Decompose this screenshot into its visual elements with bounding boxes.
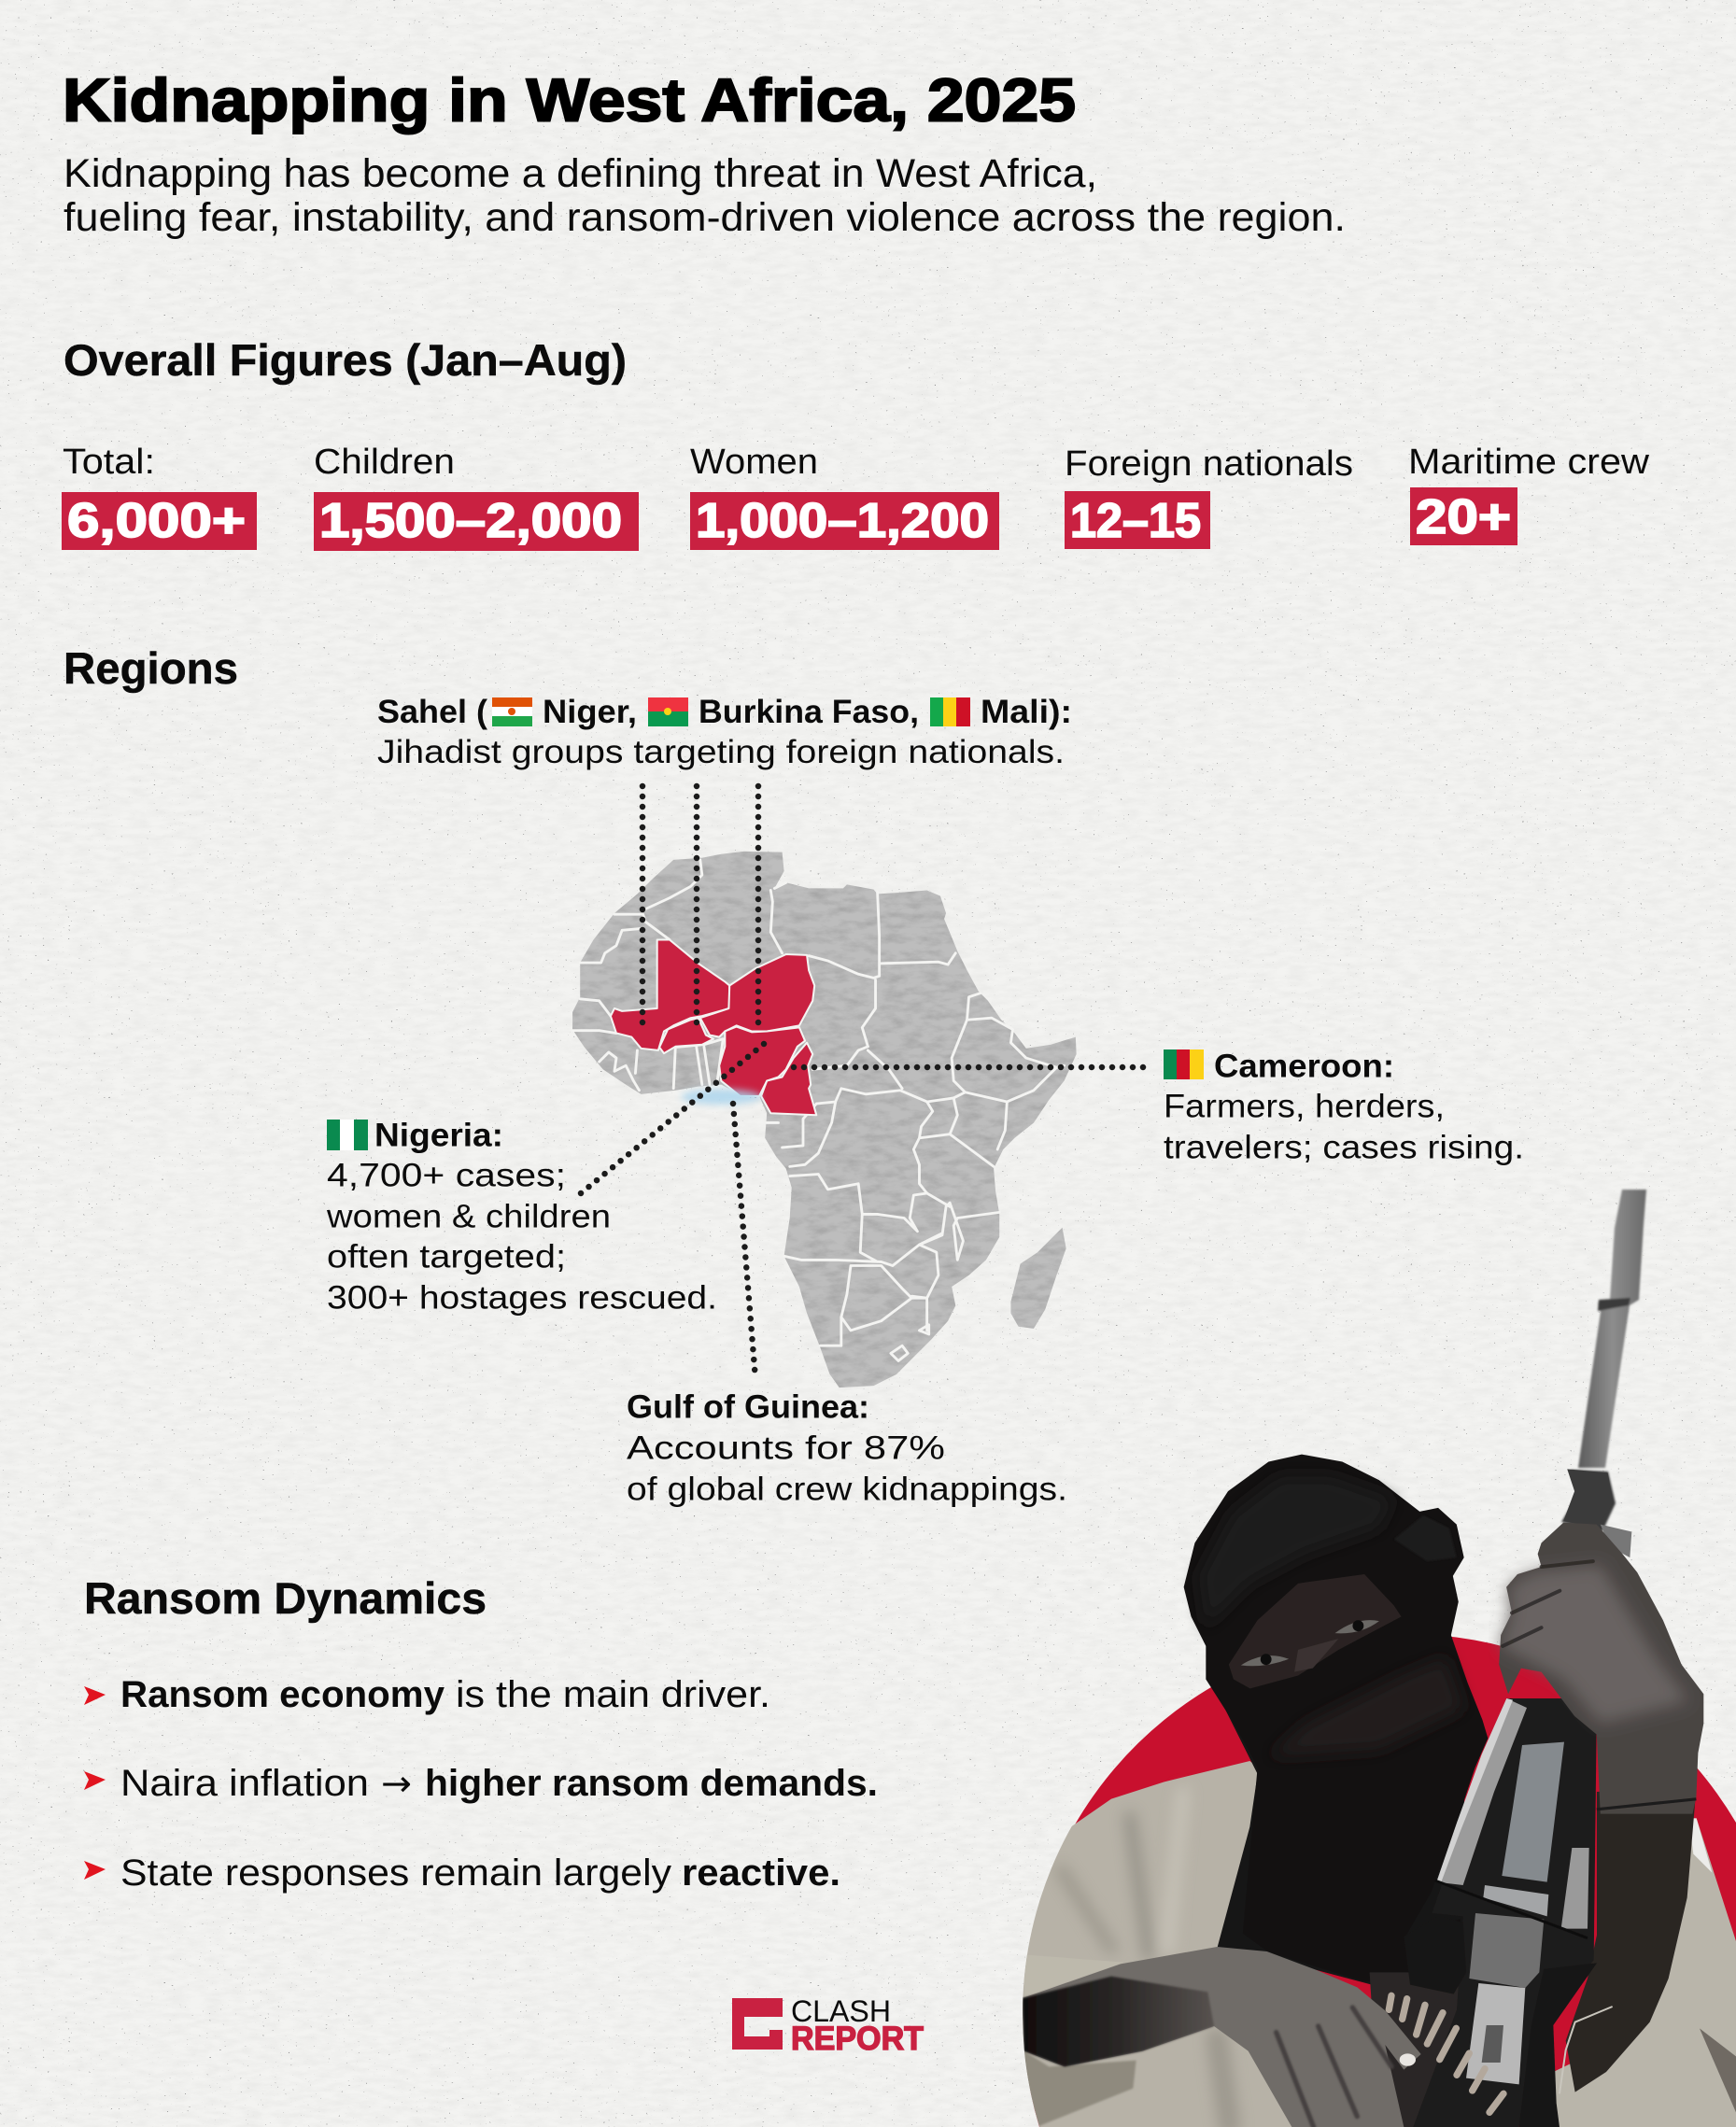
red circle [1023, 1634, 1736, 2127]
label: Sahel: Burkina Faso, [699, 694, 919, 730]
bullet: ransom economy: is the main driver. [456, 1674, 770, 1715]
label: Cameroon: Cameroon: [1214, 1048, 1394, 1085]
subtitle: fueling fear, instability, and ransom-driven violence across the region. [64, 195, 1346, 240]
head wrap and mask [1184, 1455, 1488, 1981]
label: Nigeria: often targeted; [327, 1238, 566, 1275]
bullet: ransom economy: Ransom economy [120, 1674, 445, 1715]
ammunition belt [1389, 1995, 1503, 2112]
bullet: state responses [84, 1852, 840, 1894]
land mass [572, 852, 1077, 1387]
rifle barrel [1561, 1190, 1646, 1531]
label: Nigeria: 300+ hostages rescued. [327, 1279, 717, 1317]
left arm and hand [1023, 1947, 1421, 2127]
subtitle: Kidnapping has become a defining threat in West Africa, [64, 151, 1097, 196]
stat: women [690, 443, 999, 550]
bullet: state responses: reactive. [682, 1852, 840, 1894]
robe: right side [1553, 1818, 1736, 2127]
label: Cameroon: travelers; cases rising. [1164, 1130, 1524, 1165]
heading: ransom dynamics: Ransom Dynamics [84, 1573, 487, 1623]
bullet: ransom economy [84, 1674, 770, 1715]
label: Cameroon [1164, 1048, 1524, 1165]
label: Nigeria: Nigeria: [374, 1117, 503, 1154]
photo: armed militant on red circle [1018, 1190, 1736, 2127]
label: Gulf of Guinea [627, 1389, 1067, 1507]
bullet: state responses: State responses remain largely [120, 1852, 671, 1894]
rifle body [1370, 1698, 1613, 2127]
label: Gulf of Guinea: Gulf of Guinea: [627, 1389, 869, 1425]
flag: Nigeria [327, 1120, 368, 1150]
label: Sahel: Sahel ( [377, 694, 487, 730]
stat: maritime crew: Maritime crew [1408, 443, 1650, 482]
dotted leaders [581, 786, 1146, 1379]
face and eyes [1229, 1574, 1402, 1688]
stat: foreign nationals: Foreign nationals [1065, 444, 1353, 484]
logo: Clash Report: REPORT [791, 2021, 924, 2057]
flag: Burkina Faso [648, 697, 688, 726]
stat: children [314, 443, 639, 551]
title: Kidnapping in West Africa, 2025 [63, 65, 1076, 134]
heading: overall figures: Overall Figures (Jan–Aug) [64, 335, 627, 385]
right forearm [1566, 1785, 1697, 2092]
stat: total: 6,000+ [67, 494, 246, 548]
stat: foreign nationals [1065, 444, 1353, 549]
heading: regions: Regions [64, 643, 238, 693]
label: Sahel: Mali): [981, 694, 1072, 730]
gulf of Guinea highlight [681, 1090, 761, 1105]
flag: Cameroon [1164, 1049, 1204, 1079]
map of Africa [572, 852, 1077, 1387]
black scarf over neck and chest [1211, 1681, 1464, 1995]
label: Cameroon: Farmers, herders, [1164, 1089, 1445, 1124]
stat: maritime crew: 20+ [1416, 490, 1511, 544]
label: Nigeria [326, 1117, 717, 1317]
stat: women: 1,000–1,200 [696, 494, 989, 548]
stat: children: Children [314, 443, 455, 482]
label: Sahel: Jihadist groups targeting foreign nationals. [377, 734, 1065, 770]
flag: Mali [930, 697, 970, 726]
flag: Niger [492, 697, 532, 726]
robe: left shoulder and torso [1023, 1761, 1292, 2127]
country borders [572, 860, 1065, 1361]
rifle sight bracket and hand [1499, 1469, 1703, 1814]
stat: women: Women [690, 443, 818, 482]
bullet: naira inflation: higher ransom demands. [425, 1763, 878, 1804]
highlighted countries [611, 940, 816, 1115]
stat: total [62, 443, 257, 550]
bullet: naira inflation: Naira inflation [120, 1763, 369, 1804]
label: Gulf of Guinea: Accounts for 87% [627, 1430, 945, 1466]
logo: Clash Report [732, 1994, 924, 2057]
label: Sahel [377, 694, 1072, 770]
stat: maritime crew [1408, 443, 1650, 545]
stat: children: 1,500–2,000 [319, 494, 622, 548]
stat: total: Total: [63, 443, 155, 482]
stat: foreign nationals: 12–15 [1070, 494, 1201, 548]
label: Nigeria: women & children [326, 1199, 611, 1234]
label: Sahel: Niger, [543, 694, 637, 730]
bullet: naira inflation [84, 1763, 878, 1804]
bullet: naira inflation: → [381, 1763, 412, 1804]
label: Gulf of Guinea: of global crew kidnappings. [627, 1472, 1067, 1507]
logo: Clash Report: CLASH [791, 1994, 891, 2028]
label: Nigeria: 4,700+ cases; [327, 1158, 566, 1193]
subtitle [64, 151, 1346, 240]
